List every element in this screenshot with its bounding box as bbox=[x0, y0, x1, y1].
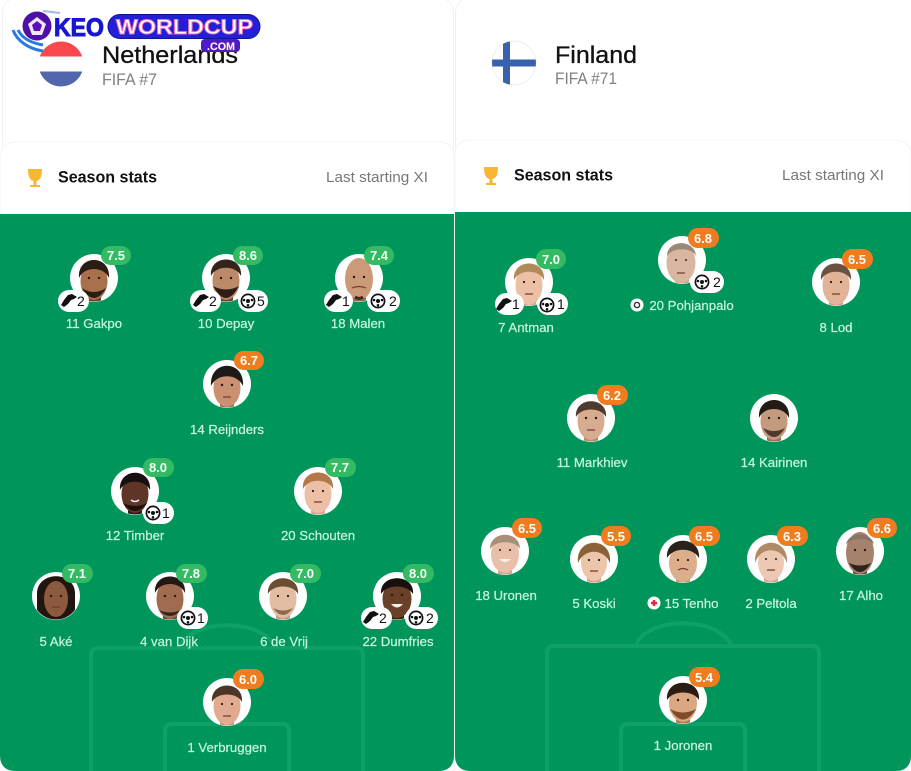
badge: .COM bbox=[201, 39, 240, 53]
player: Aké bbox=[32, 564, 93, 649]
panel: Netherlands season stats bbox=[0, 142, 454, 771]
player: Alho: 17 Alho bbox=[839, 588, 883, 603]
panel: Finland header card bbox=[456, 0, 911, 187]
player: Kairinen: 14 Kairinen bbox=[741, 455, 807, 470]
player: de Vrij: 7.0 bbox=[296, 566, 314, 581]
player: Uronen bbox=[475, 518, 542, 603]
player: Peltola: 6.3 bbox=[783, 529, 801, 544]
player: de Vrij: 6 de Vrij bbox=[260, 634, 308, 649]
player: Alho bbox=[836, 518, 897, 603]
player: Timber: 1 bbox=[162, 505, 170, 521]
icon: trophy bbox=[484, 167, 498, 185]
player: Gakpo: 11 Gakpo bbox=[66, 316, 122, 331]
player: Joronen: 5.4 bbox=[695, 670, 714, 685]
player: van Dijk: 4 van Dijk bbox=[140, 634, 198, 649]
player: Dumfries bbox=[361, 564, 438, 649]
player: Verbruggen: 6.0 bbox=[239, 672, 257, 687]
player: Timber bbox=[106, 458, 174, 543]
player: Aké: 5 Aké bbox=[40, 634, 72, 649]
text: Last starting XI: Last starting XI bbox=[782, 168, 884, 184]
player: Depay: 10 Depay bbox=[198, 316, 255, 331]
player: Schouten bbox=[281, 458, 356, 543]
player: Markhiev: 6.2 bbox=[603, 388, 621, 403]
player: Uronen: 18 Uronen bbox=[475, 588, 537, 603]
player: Kairinen bbox=[741, 394, 807, 470]
player: Depay: 2 bbox=[209, 293, 217, 309]
player: Markhiev: 11 Markhiev bbox=[557, 455, 628, 470]
panel: Netherlands header card bbox=[2, 0, 454, 187]
player: Malen: 18 Malen bbox=[331, 316, 385, 331]
player: Lod: 6.5 bbox=[848, 252, 866, 267]
player: Lod bbox=[812, 249, 873, 335]
player: Peltola: 2 Peltola bbox=[745, 596, 797, 611]
pitch: Netherlands bbox=[0, 214, 454, 771]
player: Peltola bbox=[745, 526, 808, 611]
text: Finland FIFA rank: FIFA #71 bbox=[555, 70, 617, 88]
player: de Vrij bbox=[259, 564, 321, 649]
flag: Finland bbox=[492, 41, 536, 85]
badge: WORLDCUP: WORLDCUP bbox=[116, 16, 253, 39]
badge: .COM: .COM bbox=[207, 41, 235, 53]
player: Koski bbox=[570, 526, 631, 611]
player: Depay bbox=[190, 246, 268, 331]
player: Tenho bbox=[648, 526, 720, 611]
pitch: Finland bbox=[455, 212, 911, 771]
player: Antman: 7 Antman bbox=[498, 320, 554, 335]
heading: Season stats: Season stats bbox=[58, 168, 157, 186]
player: Timber: 8.0 bbox=[149, 460, 167, 475]
player: Tenho: 15 Tenho bbox=[664, 596, 719, 611]
player: Alho: 6.6 bbox=[873, 521, 891, 536]
player: Dumfries: 8.0 bbox=[409, 566, 427, 581]
player: Dumfries: 2 bbox=[379, 610, 387, 626]
player: Schouten: 20 Schouten bbox=[281, 528, 355, 543]
player: Malen: 2 bbox=[389, 293, 397, 309]
player: Verbruggen: 1 Verbruggen bbox=[187, 740, 267, 755]
icon: trophy bbox=[28, 169, 42, 187]
player: Antman: 7.0 bbox=[542, 252, 560, 267]
player: Koski: 5.5 bbox=[607, 529, 625, 544]
logo: Keo Worldcup bbox=[13, 11, 260, 53]
heading: Finland: Finland bbox=[555, 42, 637, 69]
player: Antman: 1 bbox=[557, 296, 565, 312]
player: Malen bbox=[324, 246, 400, 331]
icon: injury bbox=[648, 596, 660, 610]
player: van Dijk: 7.8 bbox=[182, 566, 200, 581]
player: Depay: 8.6 bbox=[239, 248, 257, 263]
player: Uronen: 6.5 bbox=[518, 521, 536, 536]
player: Tenho: 6.5 bbox=[695, 529, 713, 544]
icon: soccer ball bbox=[22, 11, 60, 40]
player: Dumfries: 2 bbox=[426, 610, 434, 626]
player: Gakpo: 7.5 bbox=[107, 248, 125, 263]
player: Antman bbox=[495, 249, 568, 335]
player: Pohjanpalo: 6.8 bbox=[694, 231, 712, 246]
flag: Netherlands bbox=[38, 41, 84, 88]
text: Netherlands FIFA rank: FIFA #7 bbox=[102, 71, 157, 89]
player: Malen: 7.4 bbox=[370, 248, 389, 263]
player: van Dijk: 1 bbox=[197, 610, 205, 626]
icon: swoosh bbox=[13, 30, 43, 51]
player: Depay: 5 bbox=[257, 293, 265, 309]
player: Aké: 7.1 bbox=[68, 566, 86, 581]
player: Koski: 5 Koski bbox=[572, 596, 616, 611]
player: Schouten: 7.7 bbox=[331, 460, 349, 475]
text: Last starting XI: Last starting XI bbox=[326, 170, 428, 186]
text: KEO: KEO bbox=[54, 14, 104, 42]
player: Gakpo: 2 bbox=[77, 293, 85, 309]
player: Pohjanpalo: 20 Pohjanpalo bbox=[649, 298, 734, 313]
icon: captain bbox=[630, 298, 644, 312]
player: Gakpo bbox=[58, 246, 131, 331]
player: Timber: 12 Timber bbox=[106, 528, 165, 543]
panel: Finland season stats bbox=[455, 140, 911, 771]
pitch lines: Finland penalty area bbox=[547, 623, 819, 771]
player: Malen: 1 bbox=[342, 293, 350, 309]
heading: Netherlands: Netherlands bbox=[102, 42, 238, 69]
player: Lod: 8 Lod bbox=[819, 320, 853, 335]
player: Markhiev bbox=[557, 385, 628, 470]
player: Joronen: 1 Joronen bbox=[654, 738, 712, 753]
player: Verbruggen bbox=[187, 669, 267, 755]
player: Joronen bbox=[654, 667, 720, 753]
player: Pohjanpalo bbox=[630, 228, 734, 313]
heading: Season stats: Season stats bbox=[514, 166, 613, 184]
player: Antman: 1 bbox=[512, 296, 520, 312]
player: Reijnders: 14 Reijnders bbox=[190, 422, 264, 437]
player: Reijnders bbox=[190, 351, 264, 437]
player: Reijnders: 6.7 bbox=[240, 353, 258, 368]
player: Dumfries: 22 Dumfries bbox=[362, 634, 434, 649]
player: van Dijk bbox=[140, 564, 208, 649]
pitch lines: Netherlands penalty area bbox=[91, 625, 363, 771]
player: Pohjanpalo: 2 bbox=[713, 274, 721, 290]
